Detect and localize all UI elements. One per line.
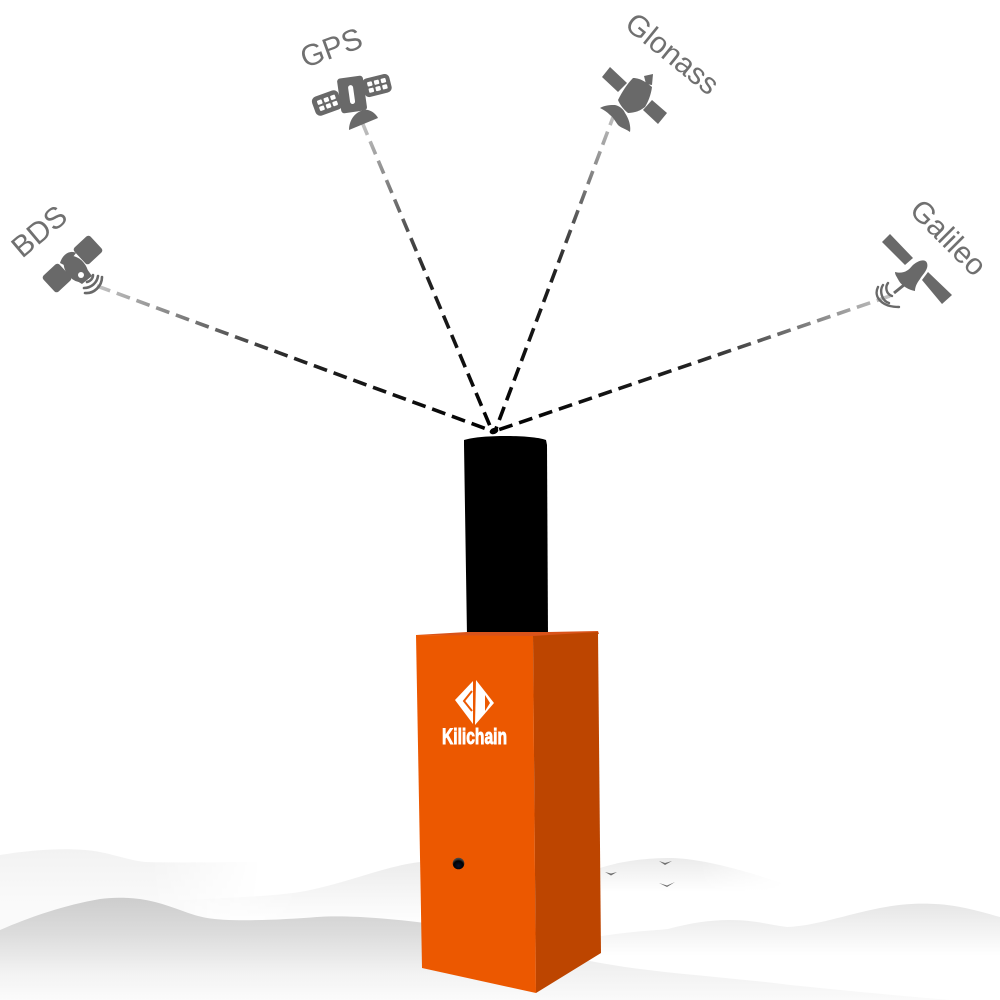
signal line: GPS [362, 122, 492, 431]
dashed signal lines [97, 112, 890, 431]
logo wordmark: Kilichain [442, 724, 507, 749]
icon: Glonass satellite [600, 67, 667, 132]
antenna cylinder [464, 436, 548, 636]
enclosure front face [416, 635, 536, 993]
icon: GPS satellite [310, 73, 393, 130]
signal line: Glonass [495, 112, 615, 431]
birds [605, 861, 675, 887]
enclosure top edge [416, 631, 599, 637]
indicator light [453, 858, 464, 869]
icon: BDS satellite [41, 234, 104, 294]
signal line: Galileo [495, 296, 890, 431]
satellite label: Galileo: Galileo [903, 193, 993, 283]
enclosure side face [533, 632, 601, 993]
satellite label: GPS: GPS [296, 22, 367, 75]
Kilichain logo [442, 680, 507, 749]
orange enclosure [416, 631, 601, 993]
misty hills background [0, 849, 1000, 1000]
logo mark [455, 680, 494, 725]
signal line: BDS [97, 286, 492, 431]
icon: Galileo satellite [877, 234, 952, 307]
satellite label: Glonass: Glonass [619, 7, 725, 102]
satellite label: BDS: BDS [5, 199, 74, 264]
